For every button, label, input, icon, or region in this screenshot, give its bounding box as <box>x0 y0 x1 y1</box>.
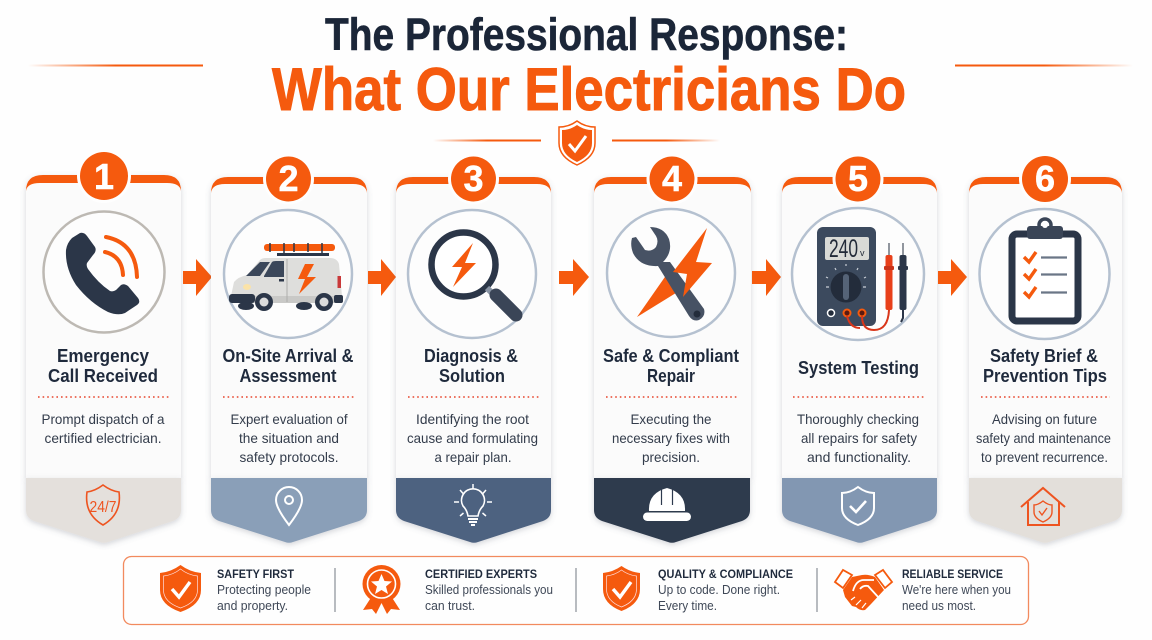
band: light bulb <box>396 478 551 543</box>
arrow 2 <box>368 259 396 296</box>
step 6 heading: Prevention Tips <box>983 366 1107 386</box>
step 1 text: certified electrician. <box>44 430 162 446</box>
icon: multimeter: v <box>860 248 865 258</box>
step 2 heading: On-Site Arrival & <box>222 346 354 366</box>
icon: magnifier with bolt <box>408 210 536 338</box>
step 2 text: Expert evaluation of <box>230 411 348 427</box>
step 6 heading: Safety Brief & <box>990 346 1098 366</box>
step 4 text: necessary fixes with <box>612 430 730 446</box>
arrow 4 <box>752 259 781 296</box>
icon: phone <box>44 212 164 332</box>
step 1 heading: Call Received <box>48 366 158 386</box>
band: 24/7 <box>26 478 181 543</box>
step 5 text: and functionality. <box>807 449 911 465</box>
step 1 text <box>42 411 165 446</box>
icon: award rosette <box>362 565 400 614</box>
value: safety first: SAFETY FIRST <box>217 567 295 581</box>
band: hard hat <box>594 478 750 543</box>
step 2 text: safety protocols. <box>240 449 338 465</box>
step 2 text <box>230 411 348 465</box>
step 6 text: safety and maintenance <box>976 430 1111 446</box>
panel: step 6 <box>969 153 1122 543</box>
panel: step 2 <box>211 154 367 543</box>
title <box>272 9 906 123</box>
icon: clipboard checklist <box>980 209 1110 339</box>
step number 3: 3 <box>463 158 484 199</box>
step 5 heading: System Testing <box>798 358 919 378</box>
step 1 heading <box>48 346 158 386</box>
step 5 text: Thoroughly checking <box>797 411 919 427</box>
value: certified experts: can trust. <box>425 599 475 613</box>
step 4 text: Executing the <box>630 411 712 427</box>
step 6 heading <box>983 346 1107 386</box>
icon: shield check <box>160 565 201 612</box>
step number 4: 4 <box>662 158 682 199</box>
step 3 text: a repair plan. <box>434 449 512 465</box>
value: quality and compliance: Up to code. Done right. <box>658 583 780 597</box>
step 4 text: precision. <box>642 449 700 465</box>
step 6 text <box>976 411 1111 465</box>
step 3 text: cause and formulating <box>407 430 538 446</box>
step number 4 <box>646 154 698 204</box>
title: What Our Electricians Do <box>272 56 906 123</box>
step 5 text <box>797 411 919 465</box>
icon: multimeter <box>792 208 924 340</box>
band: shield check <box>782 478 937 543</box>
title: The Professional Response: <box>325 9 848 60</box>
step number 6 <box>1019 153 1071 205</box>
value: reliable service: We're here when you <box>902 583 1011 597</box>
step number 3 <box>448 154 499 204</box>
panel: step 3 <box>396 154 551 543</box>
step 2 heading: Assessment <box>240 366 337 386</box>
panel: step 5 <box>782 154 937 543</box>
icon: service van <box>224 210 352 338</box>
step 4 text <box>612 411 730 465</box>
step 3 text <box>407 411 538 465</box>
value: safety first: Protecting people <box>217 583 311 597</box>
step 1 text: Prompt dispatch of a <box>42 411 165 427</box>
step 5 text: all repairs for safety <box>801 430 917 446</box>
step 3 heading: Solution <box>439 366 505 386</box>
icon: wrench and bolt <box>607 209 735 337</box>
value: safety first: and property. <box>217 599 288 613</box>
step number 1: 1 <box>94 156 114 197</box>
arrow 3 <box>559 259 589 296</box>
value: quality and compliance: Every time. <box>658 599 717 613</box>
panel: values strip <box>124 556 1028 624</box>
step 4 heading: Safe & Compliant <box>603 346 739 366</box>
value: reliable service: need us most. <box>902 599 976 613</box>
step 3 heading <box>424 346 518 386</box>
value: quality and compliance <box>603 566 793 613</box>
value: safety first <box>160 565 311 613</box>
step number 2 <box>263 154 314 204</box>
value: quality and compliance: QUALITY & COMPLIANCE <box>658 567 793 581</box>
step number 1 <box>77 149 131 203</box>
value: certified experts <box>362 565 553 614</box>
step 6 text: to prevent recurrence. <box>981 449 1108 465</box>
icon: title shield <box>559 121 595 165</box>
step 3 text: Identifying the root <box>416 411 529 427</box>
icon: handshake <box>835 570 892 610</box>
step 1 heading: Emergency <box>57 346 149 366</box>
band: 24/7: 24/7 <box>90 499 117 516</box>
arrow 1 <box>183 259 212 296</box>
arrow 5 <box>938 259 967 296</box>
icon: shield check <box>603 566 640 611</box>
step 6 text: Advising on future <box>992 411 1097 427</box>
panel: step 4 <box>594 154 751 543</box>
icon: multimeter: 240 <box>829 235 858 263</box>
step number 5: 5 <box>848 158 868 199</box>
step number 5 <box>832 154 884 204</box>
step 2 heading <box>222 346 354 386</box>
band: safe home <box>969 478 1122 543</box>
panel: step 1 <box>26 149 181 543</box>
band: location pin <box>211 478 367 543</box>
step 4 heading: Repair <box>647 366 695 386</box>
step 2 text: the situation and <box>239 430 339 446</box>
value: reliable service: RELIABLE SERVICE <box>902 567 1003 581</box>
step 4 heading <box>603 346 739 386</box>
value: certified experts: CERTIFIED EXPERTS <box>425 567 537 581</box>
step number 6: 6 <box>1035 158 1055 199</box>
value: reliable service <box>835 567 1011 613</box>
step number 2: 2 <box>278 158 299 199</box>
value: certified experts: Skilled professionals you <box>425 583 553 597</box>
step 3 heading: Diagnosis & <box>424 346 518 366</box>
